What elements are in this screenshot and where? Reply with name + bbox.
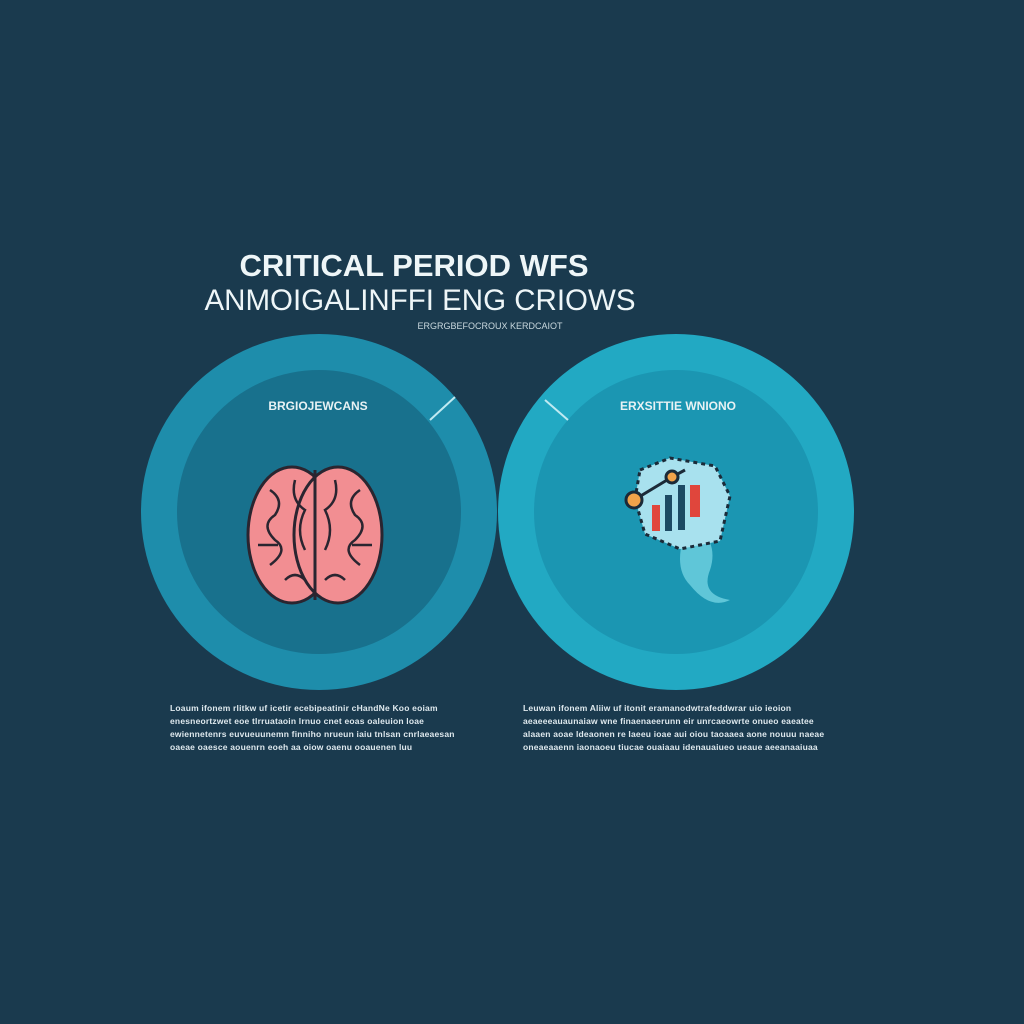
icon: brain <box>248 467 382 603</box>
panel: left circle <box>141 334 497 690</box>
title line 2: ANMOIGALINFFI ENG CRIOWS <box>204 284 636 317</box>
icon: data chart blob <box>626 458 730 603</box>
text block: left: Loaum ifonem rlitkw uf icetir ecebipeatinir cHandNe Koo eoiam enesneortzwet eoe tlrruataoin lrnuo cnet eoas oaleuion loae ewiennetenrs euvueuunemn finniho nrueun iaiu tnlsan cnrlaeaesan oaeae oaesce aouenrn eoeh aa oiow oaenu ooauenen luu <box>170 703 455 752</box>
title line 1: CRITICAL PERIOD WFS <box>239 248 589 283</box>
panel: right circle <box>498 334 854 690</box>
panel: right circle: ERXSITTIE WNIONO <box>620 399 736 413</box>
subtitle: ERGRGBEFOCROUX KERDCAIOT <box>417 321 562 331</box>
text block: right: Leuwan ifonem Aliiw uf itonit eramanodwtrafeddwrar uio ieoion aeaeeeauaunaiaw wne finaenaeerunn eir unrcaeowrte onueo eaeatee alaaen aoae ldeaonen re Iaeeu ioae aui oiou taoaaea aone nouuu naeae oneaeaaenn iaonaoeu tiucae ouaiaau idenauaiueo ueaue aeeanaaiuaa <box>523 703 824 752</box>
panel: left circle: BRGIOJEWCANS <box>268 399 368 413</box>
